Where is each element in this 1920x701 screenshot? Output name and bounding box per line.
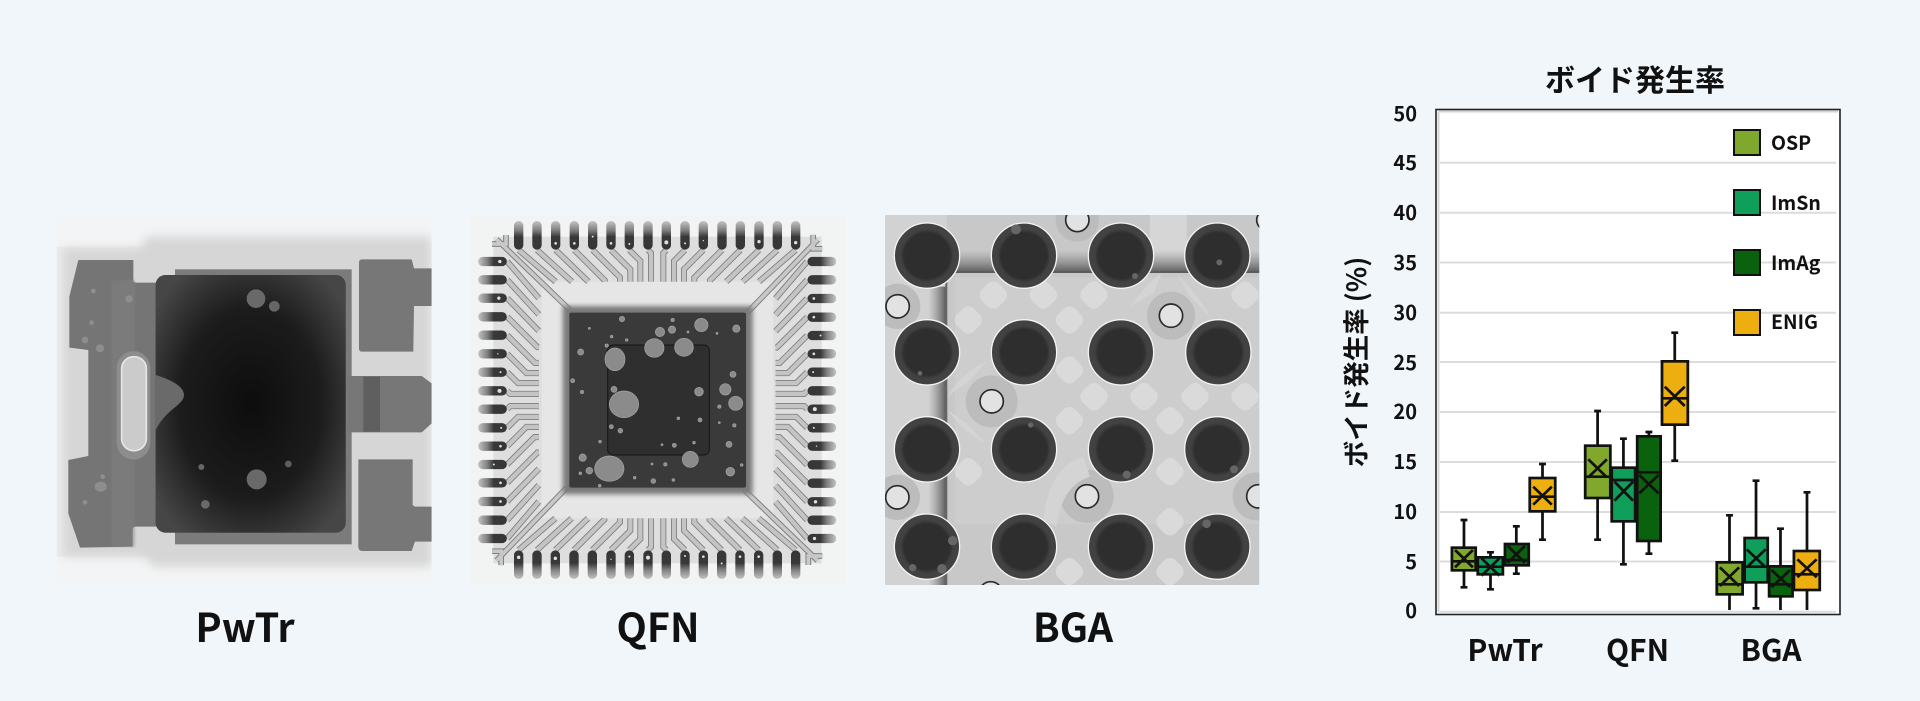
QFN ImAg [1637,432,1661,554]
QFN OSP [1585,411,1610,540]
solder balls [894,223,1251,579]
chart: void rate box plot [1335,56,1840,670]
y axis ticks: 50 [1393,98,1417,127]
PwTr ImAg [1505,526,1529,574]
y axis ticks: 35 [1393,247,1417,276]
copper pattern [885,215,1260,526]
y axis title: ボイド発生率 (%) [1335,257,1374,467]
panel: QFN X-ray image [470,215,846,585]
y axis ticks: 30 [1393,297,1417,326]
y axis ticks: 5 [1405,546,1417,575]
QFN ENIG [1662,333,1688,461]
board shadow edges [928,250,1259,585]
BGA ImAg [1769,529,1793,610]
BGA ImSn [1745,481,1768,608]
legend: ImSn [1771,187,1821,216]
PwTr OSP [1452,520,1476,587]
QFN ImSn [1612,439,1635,564]
vias [885,215,1260,585]
leads and traces on four sides [478,221,836,579]
PwTr ImSn [1478,552,1503,589]
y axis ticks: 25 [1393,347,1417,376]
legend: ImAg [1771,247,1821,276]
BGA ENIG [1794,492,1820,610]
left lead frame with mounting hole [68,260,157,548]
legend [1734,127,1821,335]
x axis categories: QFN [1606,626,1669,670]
infographic canvas [56,65,1841,667]
y axis ticks: 15 [1393,446,1417,475]
y axis ticks: 40 [1393,197,1417,226]
box groups [1452,333,1820,610]
BGA OSP [1717,515,1743,610]
y axis ticks: 45 [1393,147,1417,176]
plot frame [1436,110,1840,614]
y axis ticks: 0 [1405,595,1417,624]
y axis ticks [1393,98,1417,624]
diamond pads [951,278,1262,589]
PwTr ENIG [1530,464,1555,540]
legend: OSP [1771,127,1811,156]
label: QFN: QFN [616,597,700,654]
x axis categories: BGA [1741,626,1802,670]
label: PwTr: PwTr [195,597,295,654]
y axis ticks: 10 [1393,496,1417,525]
right side leads [348,259,432,551]
legend: ENIG [1771,306,1818,335]
chart title: ボイド発生率 [1545,56,1725,100]
x axis categories: PwTr [1467,626,1544,670]
x axis categories [1467,626,1802,670]
die with solder voids [563,306,753,494]
y axis ticks: 20 [1393,396,1417,425]
panel: PwTr X-ray image [57,215,432,585]
panel: BGA X-ray image [885,215,1260,585]
central die with solder voids [156,269,352,544]
label: BGA: BGA [1033,597,1114,654]
